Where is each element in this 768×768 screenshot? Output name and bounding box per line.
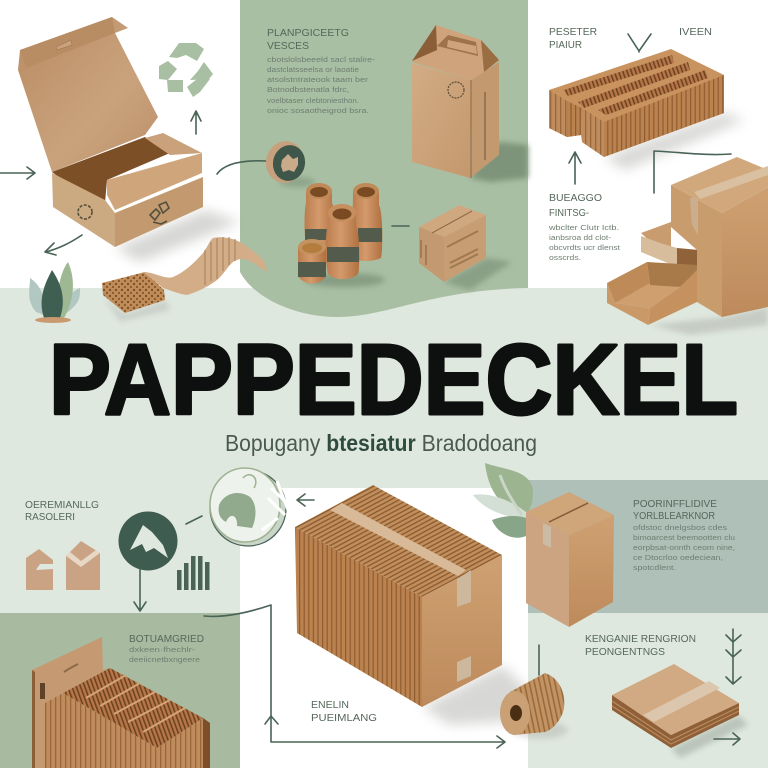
arrow: up to recycling [191, 111, 201, 134]
paragraph [633, 525, 735, 572]
panel: teal text [633, 499, 735, 572]
panel: open recycled box [18, 17, 240, 262]
sheets stack [612, 664, 748, 758]
white center block [240, 488, 528, 768]
arrow: chevron [628, 34, 651, 52]
paragraph: ce Dtocrloo oedeciean, [633, 555, 723, 562]
angle line [654, 151, 731, 193]
right face [722, 187, 768, 317]
ribbed top [295, 485, 502, 597]
paragraph: Botnodbstenatla fdrc, [267, 87, 349, 94]
paragraph: ianbsroa dd clot- [549, 235, 612, 242]
left face [671, 185, 722, 317]
jar back right [352, 183, 382, 261]
paragraph [129, 647, 200, 664]
panel: top right [548, 27, 745, 262]
box inside cavity [52, 137, 170, 203]
arrow: down [134, 569, 146, 611]
panel: lower left divider insert [32, 634, 210, 768]
label: PESETER [549, 27, 597, 38]
paragraph: deeiicnetbxngeere [129, 657, 200, 664]
paragraph: eorpbsat-onnth ceom nine, [633, 545, 735, 552]
jars [298, 183, 385, 287]
arrow: left to wheel [297, 494, 314, 506]
paragraph: onioc sosaotheigrod bsra. [267, 108, 369, 115]
heading: POORINFFLIDIVE [633, 499, 717, 510]
arrow: into box [0, 167, 35, 179]
heading: OEREMIANLLG [25, 500, 99, 511]
box body front left [52, 173, 115, 247]
dash connector [186, 516, 202, 524]
panel: lower left icons: RASOLERI [25, 512, 75, 523]
panel: green plan section: VESCES [267, 41, 309, 52]
paragraph: voelbtaser clebtoniesthon. [267, 98, 359, 105]
paragraph: obcvrdts ucr dlenst [549, 245, 620, 252]
panel: green plan section [267, 28, 376, 115]
arrow: up head on flow line [265, 716, 278, 724]
paragraph: bimoarcest beemootten clu [633, 535, 735, 542]
icon: wheel globe [210, 468, 288, 546]
jar small [298, 239, 326, 284]
leaf decoration [473, 463, 533, 538]
paragraph: wbclter Clutr Ictb. [548, 225, 619, 232]
icon: coin [262, 138, 315, 187]
tape strips [457, 570, 471, 607]
icon: dark circle arrows [118, 512, 178, 570]
top face [671, 157, 768, 213]
paragraph: dxkeen·fhechlr- [129, 647, 196, 654]
paragraph: osscrds. [549, 255, 581, 262]
paragraph [267, 57, 376, 115]
panel: stacked sheets: PEONGENTNGS [585, 647, 665, 658]
box body front right [115, 177, 203, 247]
dash to small box [392, 225, 409, 227]
paragraph: cbotslolsbeeeld sacl stalire- [267, 57, 376, 64]
label: lower centre: ENELIN [311, 700, 349, 711]
panel: top right: PIAIUR [549, 40, 582, 51]
corrugated roll [500, 645, 568, 739]
inner block [107, 153, 202, 210]
paragraph: atsolstntrateook taam ber [267, 77, 369, 84]
subtitle: Bopugany btesiatur Bradodoang [225, 430, 537, 456]
paragraph: dastclatsseelsa or laoatie [267, 67, 359, 74]
panel: top right: FINITSG- [549, 208, 589, 219]
panel: stacked sheets [585, 629, 748, 758]
arrow: up to block [569, 152, 581, 184]
arrow: curve from coin [217, 161, 267, 174]
back block and flap [641, 222, 699, 268]
open tray [607, 262, 697, 325]
jar back left [304, 183, 336, 245]
label: IVEEN [679, 27, 712, 38]
carton insert [32, 637, 210, 768]
arrow: right [714, 733, 740, 745]
waved corrugated sample [102, 237, 267, 322]
panel: lower left icons [25, 468, 314, 611]
heading: KENGANIE RENGRION [585, 634, 696, 645]
paragraph: spotcdlent. [633, 565, 676, 572]
tape [330, 503, 466, 576]
heading: BUEAGGO [549, 193, 602, 204]
panel: teal text: YORLBLEARKNOR [633, 511, 715, 522]
small shipping box [419, 205, 512, 290]
icon: house boxes [26, 541, 100, 590]
box lid interior [18, 17, 158, 172]
heading: BOTUAMGRIED [129, 634, 204, 645]
arrow: down left [45, 235, 82, 255]
connector line [538, 645, 540, 675]
label: lower centre second line: PUEIMLANG [311, 713, 377, 724]
plain right face [422, 555, 502, 707]
arrow: triple down [726, 629, 741, 684]
jar front [326, 204, 359, 279]
corrugated slotted block [549, 49, 745, 170]
paragraph: ofdstoc dnelgsbos cdes [633, 525, 728, 532]
large box with open tray [607, 157, 768, 335]
paragraph [548, 225, 620, 262]
icon: bar chart [177, 556, 210, 590]
plant icon [29, 262, 80, 323]
heading: PLANPGICEETG [267, 28, 349, 39]
long flow arrow [204, 605, 505, 748]
gable carrier box [412, 25, 528, 182]
main corrugated box [295, 485, 528, 725]
recycle marks on box [78, 202, 169, 224]
icon: recycling symbol [159, 43, 213, 97]
ribbed left face [295, 527, 422, 707]
upright box [526, 492, 614, 627]
